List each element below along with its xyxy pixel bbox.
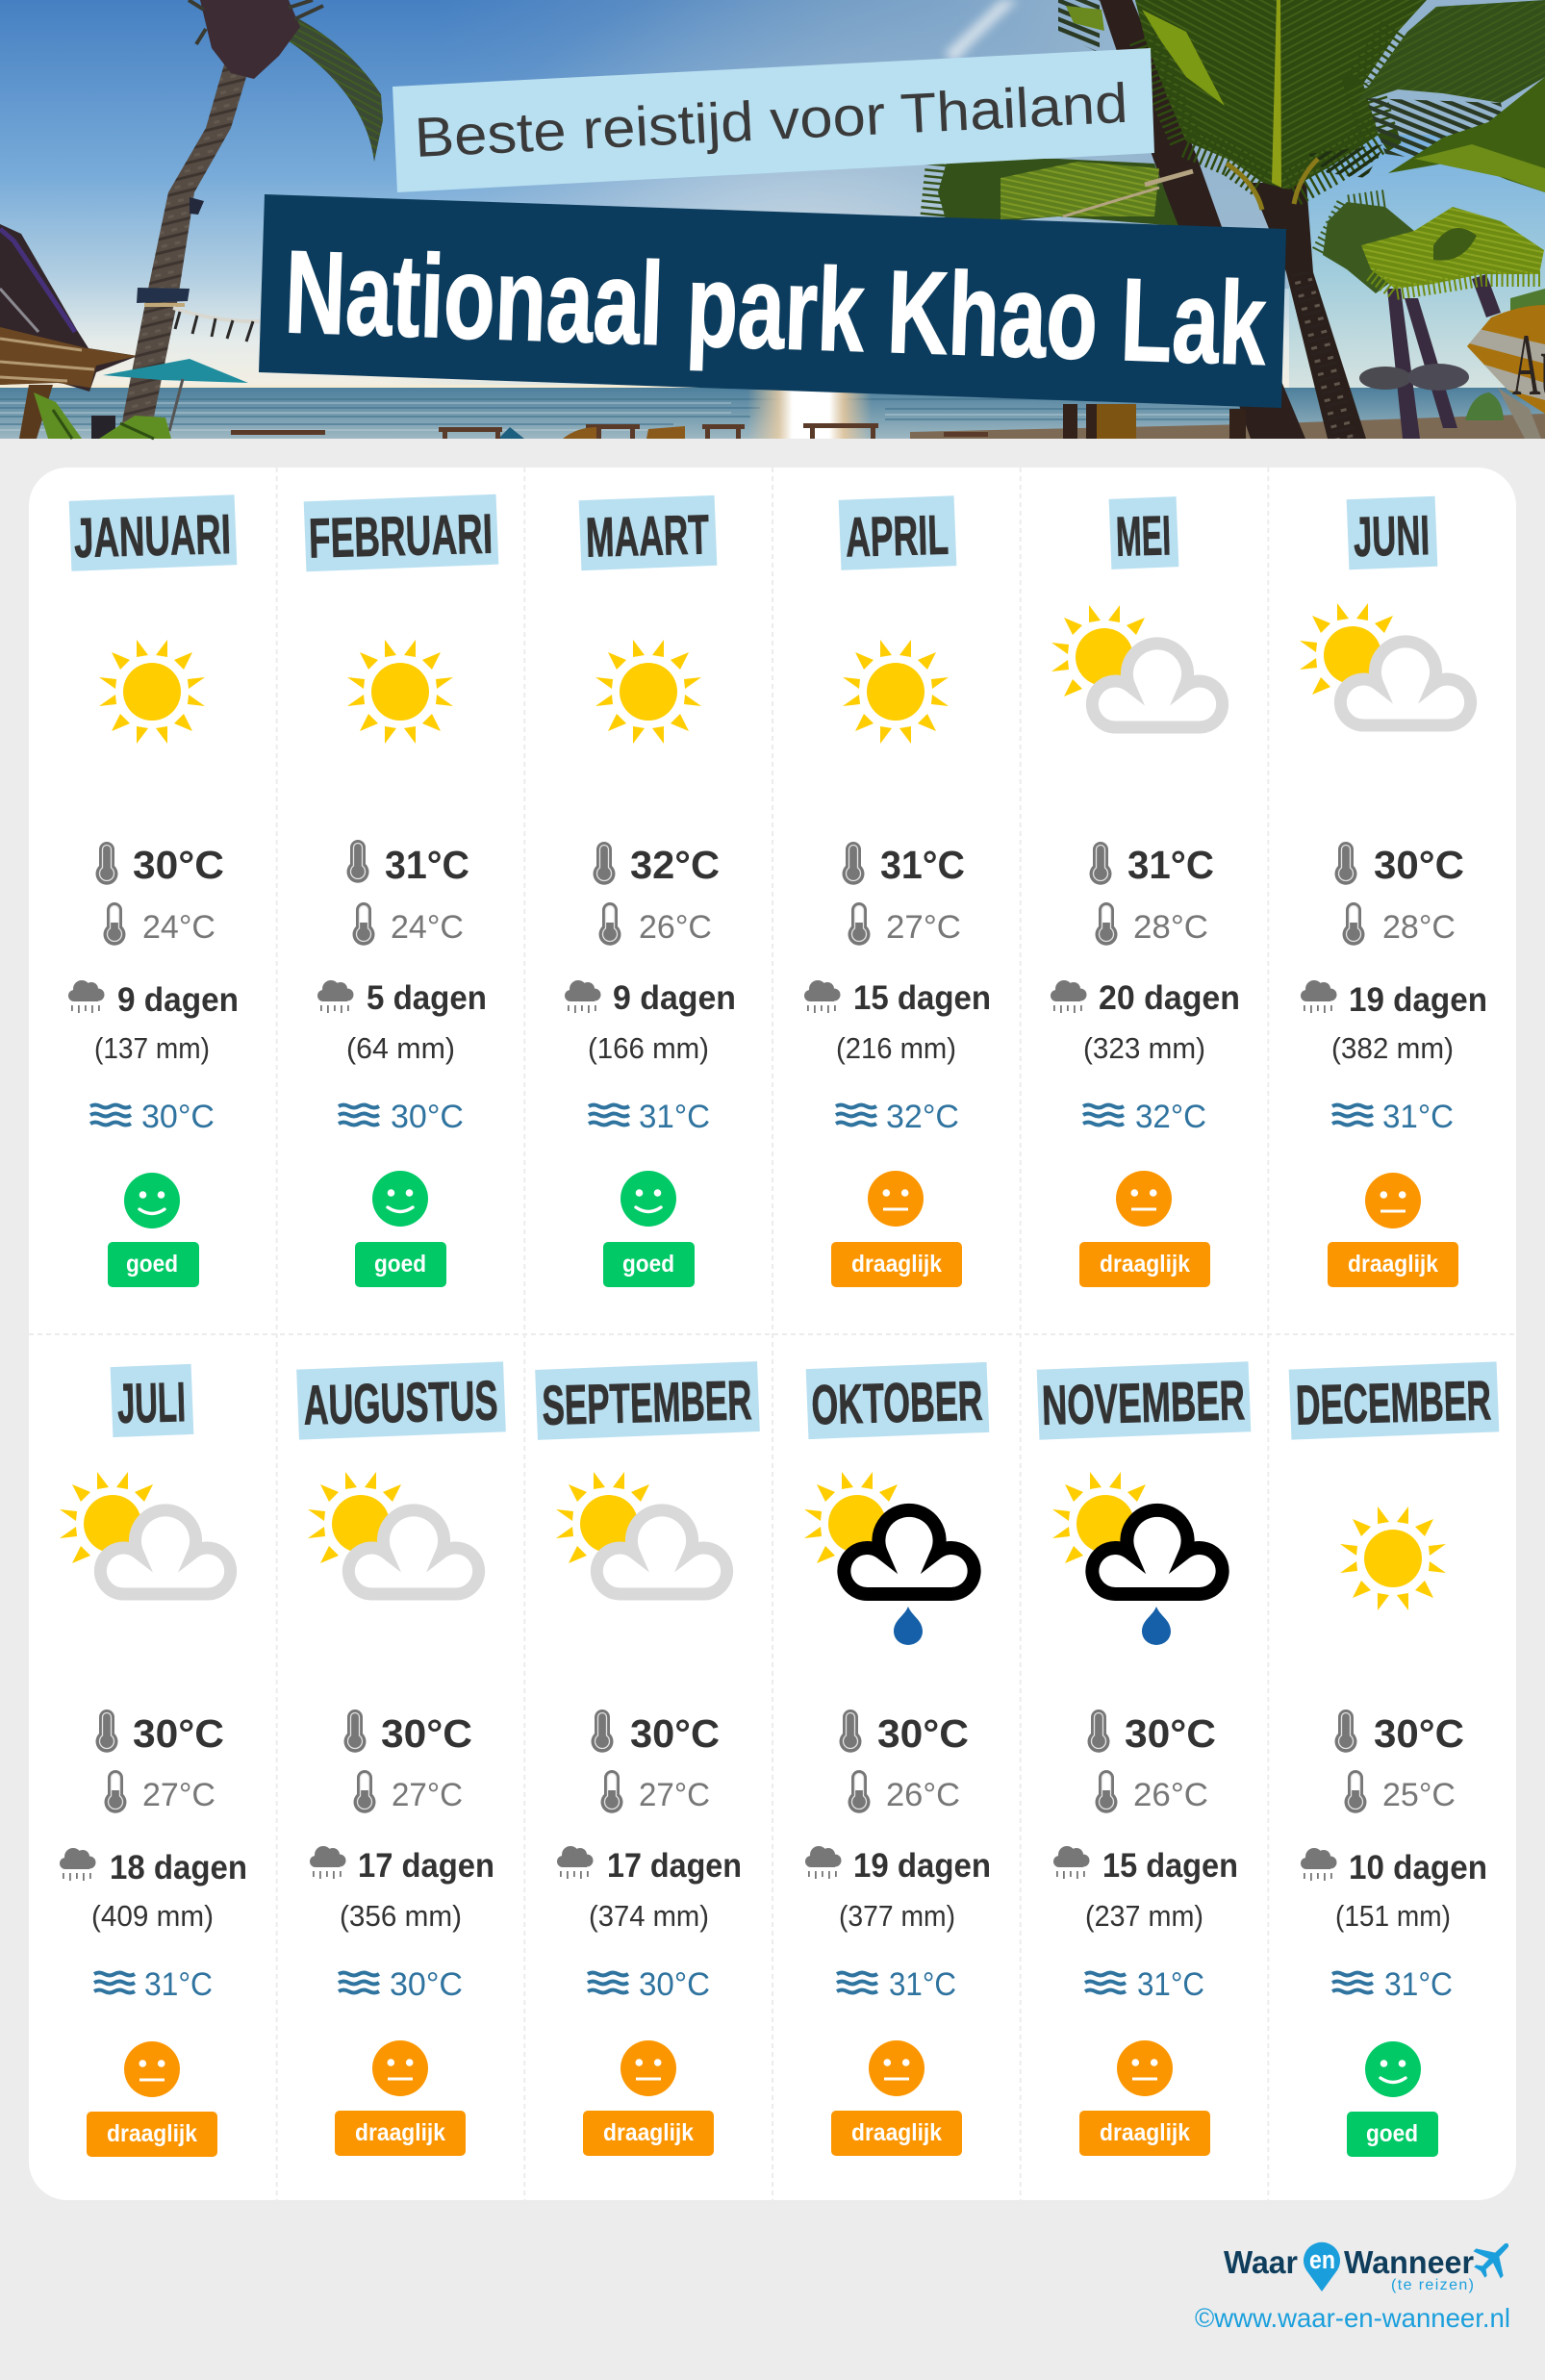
month label: augustus	[296, 1361, 506, 1440]
month label: januari: JANUARI	[73, 503, 232, 570]
month label: september: SEPTEMBER	[542, 1369, 752, 1437]
max temperature: 31°C	[385, 843, 469, 887]
beach tables	[231, 423, 988, 439]
rating smiley	[124, 2041, 180, 2097]
min temperature	[848, 1770, 960, 1813]
month label: november: NOVEMBER	[1041, 1369, 1246, 1437]
month label: oktober: OKTOBER	[811, 1370, 983, 1436]
sea temperature	[1332, 1099, 1454, 1135]
rain days	[60, 1848, 247, 1886]
panel: januari	[68, 494, 239, 1287]
month label: januari	[69, 494, 237, 571]
rating badge	[87, 2112, 217, 2157]
min temperature	[598, 902, 712, 946]
subtitle banner	[393, 48, 1154, 192]
rain days: 17 dagen	[607, 1847, 742, 1885]
rain days: 20 dagen	[1099, 979, 1240, 1017]
max temperature	[1335, 1709, 1464, 1756]
min temperature	[1095, 902, 1208, 946]
hero photo: tropical beach with palm trees	[0, 0, 1545, 439]
sea temperature: 31°C	[889, 1966, 956, 2003]
min temperature	[104, 902, 215, 946]
weather icon: sun behind grey cloud	[1051, 605, 1223, 727]
rating badge: draaglijk	[851, 1251, 942, 1278]
max temperature	[593, 842, 720, 887]
sea temperature	[836, 1099, 959, 1135]
precipitation: (374 mm)	[589, 1899, 709, 1933]
month label: maart: MAART	[585, 503, 710, 570]
rain days: 9 dagen	[117, 981, 239, 1019]
rating smiley	[868, 1171, 924, 1227]
max temperature	[1089, 842, 1214, 887]
rating badge: goed	[126, 1251, 178, 1278]
sea temperature: 30°C	[141, 1099, 215, 1135]
rating smiley	[621, 1171, 676, 1227]
rain days	[1301, 1848, 1487, 1886]
logo: Waar en Wanneer: Wanneer	[1344, 2244, 1474, 2280]
max temperature: 30°C	[630, 1711, 720, 1756]
weather icon: sun behind grey cloud	[556, 1472, 727, 1594]
panel: maart	[565, 495, 736, 1287]
rating smiley	[372, 1171, 428, 1227]
sea temperature	[1332, 1966, 1453, 2003]
min temperature: 24°C	[391, 909, 464, 946]
rating badge	[108, 1242, 199, 1287]
month label: juli	[111, 1364, 193, 1437]
min temperature: 26°C	[639, 909, 712, 946]
min temperature: 25°C	[1382, 1777, 1456, 1813]
rating badge: draaglijk	[1100, 1251, 1190, 1278]
weather icon: sun behind grey cloud	[1300, 603, 1471, 725]
month label: juni: JUNI	[1353, 504, 1431, 569]
sea temperature: 31°C	[144, 1966, 213, 2003]
month label: februari: FEBRUARI	[308, 503, 494, 570]
panel: mei	[1051, 496, 1240, 1287]
min temperature: 27°C	[886, 909, 961, 946]
month label: juli: JULI	[116, 1371, 187, 1435]
rating badge	[1328, 1242, 1458, 1287]
rain days	[805, 1846, 991, 1885]
weather icon: sun	[1340, 1506, 1446, 1610]
rating badge: draaglijk	[603, 2119, 694, 2146]
panel: juni	[1300, 496, 1487, 1287]
precipitation: (377 mm)	[839, 1899, 955, 1933]
sea temperature	[588, 1966, 710, 2003]
month label: oktober	[806, 1362, 989, 1439]
max temperature: 30°C	[381, 1711, 472, 1756]
min temperature	[1095, 1770, 1208, 1813]
max temperature	[591, 1709, 720, 1756]
rain days	[310, 1846, 494, 1885]
logo: Waar en Wanneer: (te reizen)	[1391, 2277, 1474, 2293]
white calendar card	[29, 468, 1516, 2200]
precipitation: (356 mm)	[340, 1899, 462, 1933]
min temperature: 26°C	[1133, 1777, 1208, 1813]
rating badge: draaglijk	[107, 2120, 197, 2147]
month label: november	[1037, 1361, 1251, 1440]
max temperature	[344, 1709, 472, 1756]
sea temperature	[339, 1099, 464, 1135]
weather icon: sun behind grey cloud	[308, 1472, 479, 1594]
max temperature	[843, 842, 965, 887]
rain days	[557, 1846, 742, 1885]
rain days	[1301, 980, 1487, 1019]
foreground plants	[34, 392, 171, 439]
logo: Waar en Wanneer: Waar	[1224, 2244, 1298, 2280]
weather icon: sun	[595, 640, 701, 744]
max temperature	[96, 1709, 224, 1756]
rating badge: goed	[622, 1251, 674, 1278]
max temperature: 30°C	[1374, 843, 1464, 887]
sea temperature: 30°C	[390, 1966, 463, 2003]
rating badge	[583, 2111, 714, 2156]
rating smiley	[124, 1173, 180, 1228]
max temperature: 30°C	[133, 843, 224, 887]
month label: april	[839, 495, 956, 570]
sea temperature: 30°C	[639, 1966, 710, 2003]
max temperature	[96, 842, 224, 887]
rain days	[317, 979, 487, 1017]
rating badge	[355, 1242, 446, 1287]
min temperature: 27°C	[392, 1777, 463, 1813]
sea temperature: 31°C	[1382, 1099, 1454, 1135]
rating smiley	[621, 2040, 676, 2096]
max temperature: 30°C	[877, 1711, 969, 1756]
rain days: 10 dagen	[1349, 1849, 1487, 1886]
max temperature: 31°C	[880, 843, 965, 887]
sea temperature: 31°C	[1137, 1966, 1204, 2003]
max temperature: 31°C	[1127, 843, 1214, 887]
weather icon: sun, black cloud and rain drop	[1052, 1472, 1223, 1645]
panel: november	[1037, 1361, 1251, 2156]
rating badge	[335, 2111, 466, 2156]
rain days	[68, 980, 239, 1019]
max temperature	[1335, 842, 1464, 887]
icon: map pin	[1304, 2242, 1340, 2291]
min temperature: 28°C	[1133, 909, 1208, 946]
rating smiley	[1365, 2041, 1421, 2097]
sea temperature	[94, 1966, 213, 2003]
sea temperature: 31°C	[639, 1099, 710, 1135]
logo: Waar en Wanneer	[1224, 2230, 1522, 2293]
sea temperature	[1085, 1966, 1204, 2003]
precipitation: (151 mm)	[1335, 1899, 1451, 1933]
panel: februari	[304, 494, 498, 1287]
precipitation: (137 mm)	[94, 1031, 210, 1065]
rating badge: draaglijk	[1100, 2119, 1190, 2146]
min temperature	[104, 1770, 215, 1813]
max temperature: 30°C	[133, 1711, 224, 1756]
sea temperature	[1083, 1099, 1206, 1135]
title banner	[259, 194, 1286, 408]
rating badge	[1347, 2112, 1438, 2157]
logo: Waar en Wanneer: en	[1309, 2245, 1335, 2274]
rating badge	[831, 2111, 962, 2156]
panel: december	[1289, 1361, 1499, 2157]
left palm tree	[120, 0, 383, 439]
rain days: 15 dagen	[853, 979, 991, 1017]
precipitation: (409 mm)	[91, 1899, 214, 1933]
max temperature: 32°C	[630, 843, 720, 887]
rating badge	[1079, 2111, 1210, 2156]
beach hut	[0, 224, 138, 439]
rain days: 19 dagen	[853, 1847, 991, 1885]
website credit: ©www.waar-en-wanneer.nl	[1195, 2303, 1510, 2333]
surfboard	[1467, 305, 1545, 439]
panel: september	[535, 1361, 760, 2156]
month label: mei	[1109, 496, 1178, 570]
rating badge: goed	[374, 1251, 426, 1278]
rating smiley	[372, 2040, 428, 2096]
panel: april	[804, 495, 991, 1287]
sea temperature: 32°C	[1135, 1099, 1206, 1135]
max temperature	[839, 1709, 969, 1756]
weather icon: sun	[347, 640, 453, 744]
min temperature	[1345, 1770, 1456, 1813]
sea temperature	[589, 1099, 710, 1135]
precipitation: (382 mm)	[1331, 1031, 1454, 1065]
max temperature	[346, 840, 469, 887]
weather icon: sun behind grey cloud	[60, 1472, 231, 1594]
max temperature: 30°C	[1374, 1711, 1464, 1756]
sea temperature: 31°C	[1384, 1966, 1453, 2003]
sea temperature: 32°C	[886, 1099, 959, 1135]
rain days: 19 dagen	[1349, 981, 1487, 1019]
rain days	[1053, 1846, 1238, 1885]
right palm trees	[931, 0, 1545, 439]
min temperature	[1343, 902, 1456, 946]
rating badge: draaglijk	[851, 2119, 942, 2146]
max temperature: 30°C	[1125, 1711, 1216, 1756]
rating badge	[831, 1242, 962, 1287]
rating smiley	[1117, 2040, 1173, 2096]
month label: augustus: AUGUSTUS	[303, 1369, 498, 1437]
rating badge: goed	[1366, 2120, 1418, 2147]
month label: maart	[579, 495, 717, 570]
min temperature: 24°C	[142, 909, 215, 946]
panel: oktober	[804, 1362, 991, 2156]
rating smiley	[869, 2040, 924, 2096]
weather icon: sun	[99, 640, 205, 744]
rain days: 9 dagen	[613, 979, 736, 1017]
rating badge: draaglijk	[355, 2119, 445, 2146]
min temperature: 26°C	[886, 1777, 960, 1813]
rain days: 17 dagen	[358, 1847, 494, 1885]
min temperature: 27°C	[142, 1777, 215, 1813]
rain days: 5 dagen	[367, 979, 487, 1017]
min temperature	[352, 902, 464, 946]
rain days: 15 dagen	[1102, 1847, 1238, 1885]
month label: september	[535, 1361, 760, 1440]
month label: juni	[1347, 496, 1437, 570]
min temperature	[848, 902, 961, 946]
precipitation: (166 mm)	[588, 1031, 709, 1065]
beach umbrella	[103, 359, 248, 431]
min temperature	[354, 1770, 463, 1813]
rating smiley	[1365, 1173, 1421, 1228]
month label: februari	[304, 494, 498, 571]
sea temperature	[837, 1966, 956, 2003]
min temperature: 27°C	[639, 1777, 710, 1813]
max temperature	[1087, 1709, 1216, 1756]
precipitation: (323 mm)	[1083, 1031, 1205, 1065]
sea temperature: 30°C	[391, 1099, 464, 1135]
precipitation: (237 mm)	[1085, 1899, 1203, 1933]
icon: airplane	[1466, 2230, 1522, 2286]
rating badge	[1079, 1242, 1210, 1287]
min temperature	[600, 1770, 710, 1813]
panel: augustus	[296, 1361, 506, 2156]
rating badge: draaglijk	[1348, 1251, 1438, 1278]
panel: juli	[60, 1364, 247, 2157]
rating smiley	[1116, 1171, 1172, 1227]
weather icon: sun	[843, 640, 949, 744]
rain days: 18 dagen	[110, 1849, 247, 1886]
month label: mei: MEI	[1115, 504, 1172, 569]
sea temperature	[339, 1966, 463, 2003]
rating badge	[603, 1242, 695, 1287]
min temperature: 28°C	[1382, 909, 1456, 946]
weather icon: sun, black cloud and rain drop	[804, 1472, 975, 1645]
precipitation: (64 mm)	[346, 1031, 455, 1065]
month label: april: APRIL	[845, 504, 950, 569]
subtitle banner: Beste reistijd voor Thailand	[413, 72, 1129, 169]
precipitation: (216 mm)	[836, 1031, 956, 1065]
sea temperature	[90, 1099, 215, 1135]
